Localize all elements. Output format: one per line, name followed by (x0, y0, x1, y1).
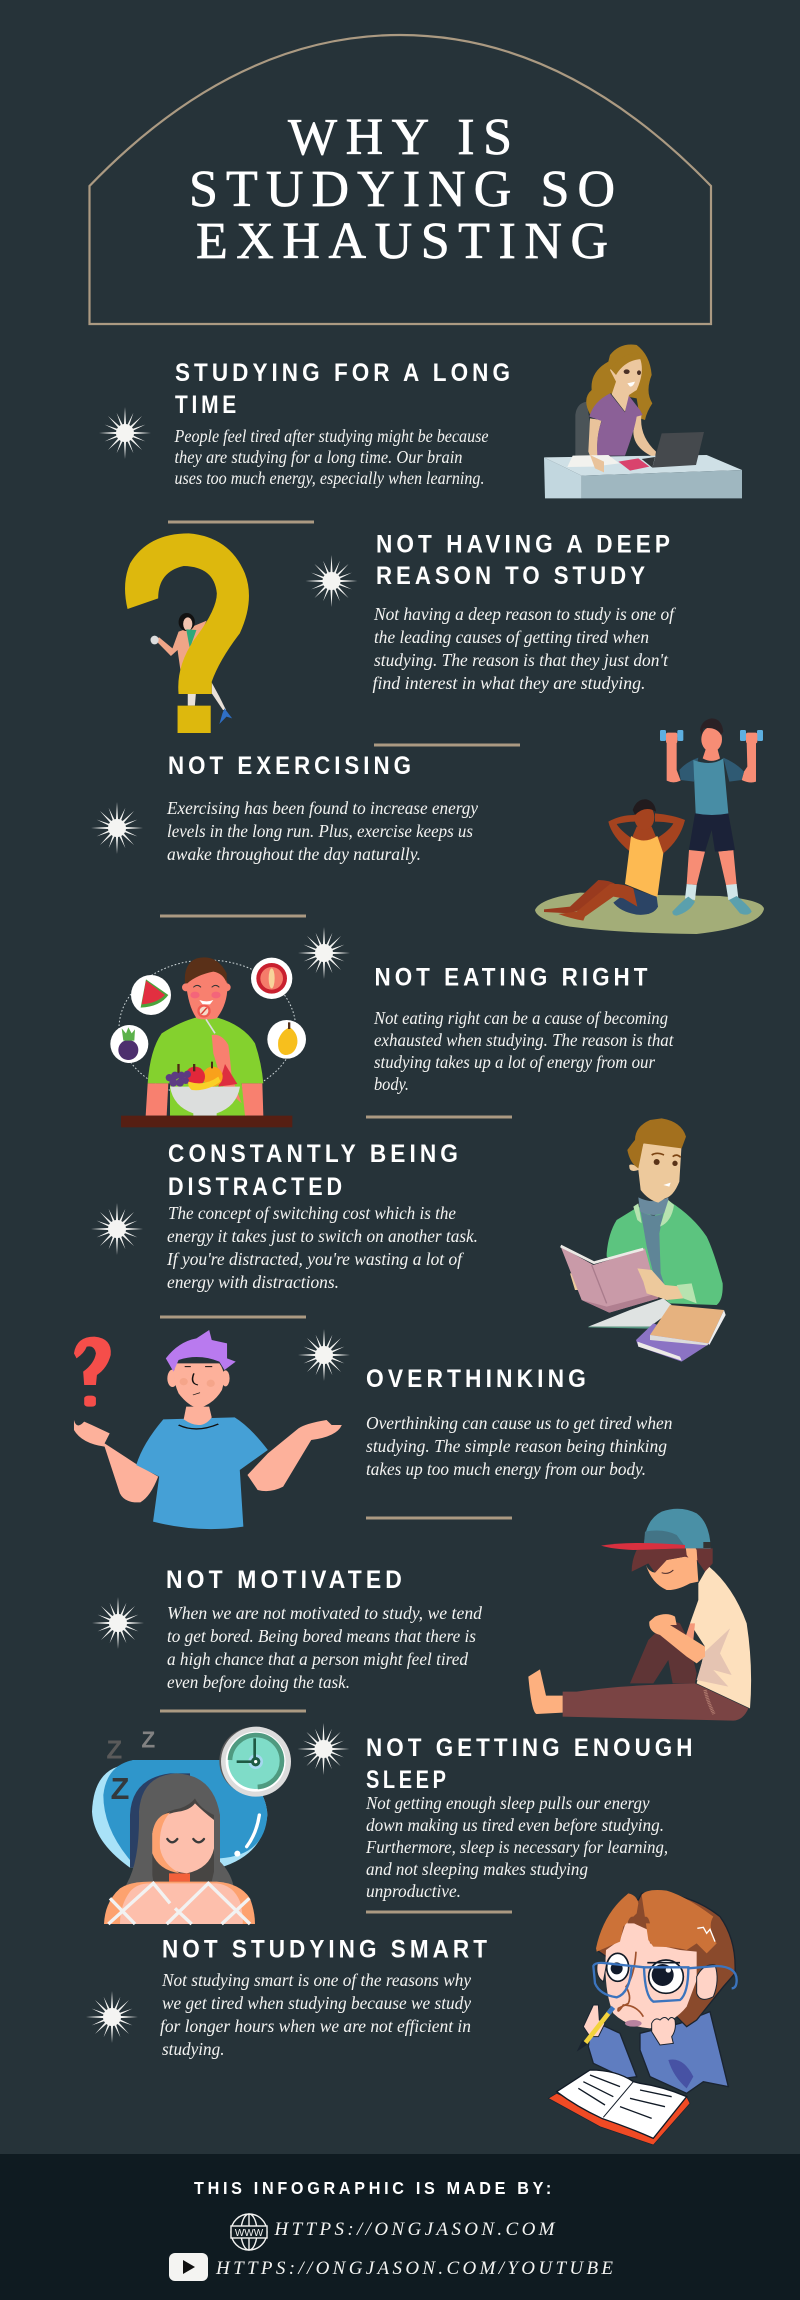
text block: studying. (162, 2039, 224, 2059)
text block: down making us tired even before studying. (366, 1815, 664, 1835)
text block: Furthermore, sleep is necessary for learning, (365, 1837, 668, 1857)
heading: REASON TO STUDY (376, 562, 649, 590)
website link: HTTPS://ONGJASON.COM (274, 2219, 556, 2240)
panel: not eating right (110, 927, 675, 1127)
heading (376, 531, 674, 590)
text block (174, 426, 489, 488)
panel: footer credits (0, 2154, 800, 2300)
text block: for longer hours when we are not efficient in (160, 2016, 471, 2036)
icon: starburst (298, 1329, 350, 1381)
footer heading: THIS INFOGRAPHIC IS MADE BY: (194, 2178, 555, 2198)
icon: video play (169, 2253, 208, 2281)
title frame (90, 35, 711, 324)
text block: Not eating right can be a cause of becoming (373, 1008, 668, 1028)
heading: NOT STUDYING SMART (162, 1936, 491, 1964)
panel: constantly being distracted (91, 1118, 726, 1362)
panel: not getting enough sleep (92, 1723, 696, 1924)
text block: People feel tired after studying might be because (174, 426, 489, 446)
heading: NOT GETTING ENOUGH (366, 1734, 696, 1762)
text block: and not sleeping makes studying (366, 1859, 588, 1879)
icon: starburst (298, 1723, 350, 1775)
panel: not motivated (92, 1509, 751, 1721)
heading: NOT EATING RIGHT (374, 964, 652, 992)
heading: CONSTANTLY BEING (168, 1140, 462, 1168)
illustration: woman behind question mark (125, 533, 249, 733)
text block: The concept of switching cost which is the (168, 1203, 456, 1223)
text block: studying. The simple reason being thinking (366, 1436, 667, 1456)
heading (366, 1734, 696, 1794)
heading: OVERTHINKING (366, 1365, 590, 1393)
text block (167, 1603, 482, 1692)
icon: www globe (231, 2214, 267, 2250)
illustration: woman at laptop (544, 345, 742, 498)
heading (175, 359, 514, 419)
text block: studying takes up a lot of energy from our (374, 1052, 655, 1072)
text block (366, 1413, 673, 1479)
text block: exhausted when studying. The reason is that (374, 1030, 675, 1050)
heading (168, 1140, 462, 1201)
text block: Not having a deep reason to study is one of (373, 604, 676, 624)
title: EXHAUSTING (196, 213, 608, 270)
text block: we get tired when studying because we study (162, 1993, 471, 2013)
text block: body. (374, 1074, 409, 1094)
title panel (90, 35, 711, 324)
icon: starburst (92, 1597, 144, 1649)
text block: Exercising has been found to increase energy (166, 798, 478, 818)
icon: starburst (91, 802, 143, 854)
text block: Not getting enough sleep pulls our energy (365, 1793, 650, 1813)
text block: uses too much energy, especially when learning. (174, 468, 484, 488)
heading: SLEEP (366, 1766, 450, 1794)
text block (166, 798, 478, 864)
illustration: sleeping woman with clock: Z (106, 1734, 122, 1764)
text block: levels in the long run. Plus, exercise keeps us (167, 821, 473, 841)
text block: unproductive. (366, 1881, 461, 1901)
icon: starburst (91, 1203, 143, 1255)
panel: not having a deep reason to study (125, 531, 676, 733)
text block: they are studying for a long time. Our brain (174, 447, 463, 467)
heading: NOT MOTIVATED (166, 1566, 406, 1594)
text block: the leading causes of getting tired when (374, 627, 649, 647)
illustration: sleeping woman with clock: Z (111, 1772, 129, 1806)
illustration: man eating fruit (110, 957, 306, 1127)
panel: not studying smart (86, 1890, 737, 2145)
text block (373, 1008, 675, 1094)
icon: starburst (306, 555, 358, 607)
icon: starburst (298, 927, 350, 979)
text block (365, 1793, 668, 1901)
text block: energy it takes just to switch on another task. (167, 1226, 478, 1246)
text block: even before doing the task. (167, 1672, 350, 1692)
illustration: man reading book (561, 1118, 726, 1362)
heading: NOT HAVING A DEEP (376, 531, 674, 559)
text block: studying. The reason is that they just don't (374, 650, 669, 670)
title: WHY IS (288, 109, 512, 166)
illustration: sleeping woman with clock: Z (141, 1726, 155, 1752)
illustration: two people exercising (535, 718, 764, 934)
text block: Overthinking can cause us to get tired when (366, 1413, 673, 1433)
title: STUDYING SO (189, 161, 615, 218)
illustration: student thinking with pencil (548, 1890, 737, 2145)
heading: TIME (175, 391, 240, 419)
panel: studying for a long time (99, 345, 742, 498)
text block: awake throughout the day naturally. (167, 844, 421, 864)
icon: www globe: WWW (235, 2228, 264, 2239)
text block: If you're distracted, you're wasting a lot of (166, 1249, 464, 1269)
illustration: confused person with question mark (74, 1330, 342, 1529)
text block: When we are not motivated to study, we tend (167, 1603, 482, 1623)
text block (160, 1970, 471, 2059)
text block: energy with distractions. (167, 1272, 339, 1292)
text block (372, 604, 676, 693)
text block: takes up too much energy from our body. (366, 1459, 646, 1479)
text block: a high chance that a person might feel tired (167, 1649, 468, 1669)
text block: Not studying smart is one of the reasons why (161, 1970, 471, 1990)
heading: STUDYING FOR A LONG (175, 359, 514, 387)
youtube link: HTTPS://ONGJASON.COM/YOUTUBE (215, 2258, 613, 2279)
text block: to get bored. Being bored means that there is (167, 1626, 476, 1646)
icon: starburst (99, 407, 151, 459)
panel: overthinking (74, 1329, 673, 1529)
icon: starburst (86, 1991, 138, 2043)
heading: DISTRACTED (168, 1173, 346, 1201)
illustration: sleeping woman with clock (92, 1726, 291, 1924)
illustration: tired boy sitting (528, 1509, 751, 1721)
heading: NOT EXERCISING (168, 752, 415, 780)
text block (166, 1203, 478, 1292)
text block: find interest in what they are studying. (372, 673, 646, 693)
title (189, 109, 615, 270)
panel: not exercising (91, 718, 764, 934)
